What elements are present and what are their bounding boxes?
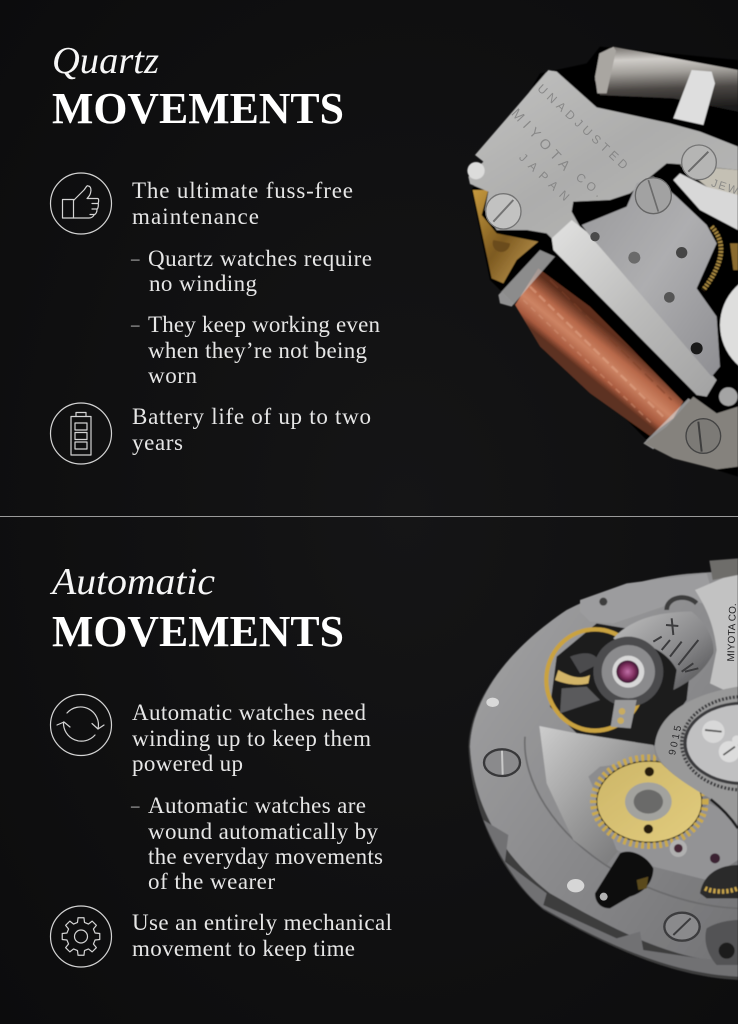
- brushed inner plate: [582, 177, 720, 377]
- text: battery life: years: [132, 430, 183, 455]
- gold plate: [473, 190, 538, 283]
- image: automatic movement: [468, 558, 738, 980]
- text: keep working bullet: worn: [148, 363, 198, 388]
- heading: Automatic MOVEMENTS: [49, 561, 344, 656]
- text: mechanical movement: movement to keep time: [132, 936, 355, 961]
- gold gear: [593, 758, 705, 846]
- divider: [0, 516, 738, 517]
- text: wound automatically bullet: –: [130, 796, 140, 815]
- dark base of quartz movement: [472, 47, 738, 477]
- gold gear edge: [703, 227, 721, 290]
- text: battery life: [132, 404, 371, 455]
- engraved calibre text: [667, 603, 738, 756]
- main plate: [470, 572, 738, 963]
- text: no winding bullet: –: [130, 249, 140, 268]
- text: wound automatically bullet: of the wearer: [148, 869, 275, 894]
- text: keep working bullet: [130, 312, 380, 388]
- text: automatic winding: powered up: [132, 751, 243, 776]
- balance wheel: [546, 629, 644, 731]
- inner step arc: [525, 737, 738, 908]
- text: automatic winding: [132, 700, 371, 776]
- icon: thumbs up: [50, 173, 112, 234]
- inner dark cavity: [550, 623, 693, 747]
- text: keep working bullet: They keep working even: [148, 312, 380, 337]
- battery tube: [595, 47, 738, 112]
- heading: Quartz MOVEMENTS: MOVEMENTS: [52, 84, 344, 133]
- text: no winding bullet: [130, 246, 372, 296]
- heading: Quartz MOVEMENTS: Quartz: [52, 40, 159, 82]
- icon: circular arrows: [50, 694, 112, 756]
- main silver plate: [468, 70, 738, 240]
- icon: battery: [50, 403, 112, 464]
- screw lower-right pocket: [705, 920, 738, 965]
- text: battery life: Battery life of up to two: [132, 404, 371, 429]
- regulator fan: [613, 612, 714, 690]
- heading: Automatic MOVEMENTS: Automatic: [49, 561, 215, 603]
- lower rim band: [483, 820, 738, 977]
- heading: Automatic MOVEMENTS: MOVEMENTS: [52, 607, 344, 656]
- engraved text: JAPAN: [516, 150, 572, 204]
- regulator engraved marks: [653, 618, 698, 672]
- text: no winding bullet: Quartz watches require: [148, 246, 372, 271]
- text: no winding bullet: no winding: [149, 271, 258, 296]
- engraved text: MIYOTA: [508, 105, 574, 174]
- wedge bridge: [539, 726, 657, 865]
- text: fuss-free maintenance: maintenance: [132, 204, 259, 229]
- heading: Quartz MOVEMENTS: [52, 40, 344, 133]
- text: mechanical movement: Use an entirely mechanical: [132, 910, 392, 935]
- screws on quartz plate: [486, 145, 721, 453]
- lower bridge lighter area: [590, 780, 738, 880]
- diagonal strip: [552, 220, 717, 397]
- white disc: [720, 272, 738, 378]
- text: wound automatically bullet: [130, 793, 383, 894]
- panel: quartz movements: [50, 40, 738, 477]
- screws and jewels: [484, 698, 700, 941]
- engraved text: [508, 81, 738, 204]
- textured lower block: [644, 397, 738, 469]
- dark opening: [595, 852, 653, 908]
- text: automatic winding: winding up to keep them: [132, 726, 371, 751]
- rim shadow: [468, 572, 738, 980]
- text: wound automatically bullet: the everyday movements: [148, 844, 383, 869]
- gear hub: [625, 782, 672, 821]
- image: quartz movement: [467, 47, 738, 477]
- text: automatic winding: Automatic watches need: [132, 700, 366, 725]
- text: fuss-free maintenance: The ultimate fuss-free: [132, 178, 353, 203]
- icon: gear: [50, 906, 112, 967]
- copper coil: [515, 268, 683, 436]
- text: keep working bullet: when they’re not being: [148, 338, 368, 363]
- text: fuss-free maintenance: [132, 178, 353, 229]
- text: mechanical movement: [132, 910, 392, 961]
- engraved text: CO.: [573, 170, 605, 200]
- centre cap: [655, 687, 738, 823]
- text: wound automatically bullet: Automatic watches are: [148, 793, 366, 818]
- text: wound automatically bullet: wound automatically by: [148, 819, 378, 844]
- lower right cavity: [700, 865, 738, 898]
- top right bar: [695, 572, 738, 697]
- engraved text: UNADJUSTED: [535, 81, 631, 172]
- top bridge: [580, 573, 717, 623]
- balance cock: [593, 637, 663, 707]
- right bar: [673, 173, 738, 230]
- engraved calibre text: 9015: [667, 724, 684, 756]
- text: keep working bullet: –: [130, 315, 140, 334]
- coil ends: [498, 250, 555, 307]
- panel: automatic movements: [49, 558, 738, 980]
